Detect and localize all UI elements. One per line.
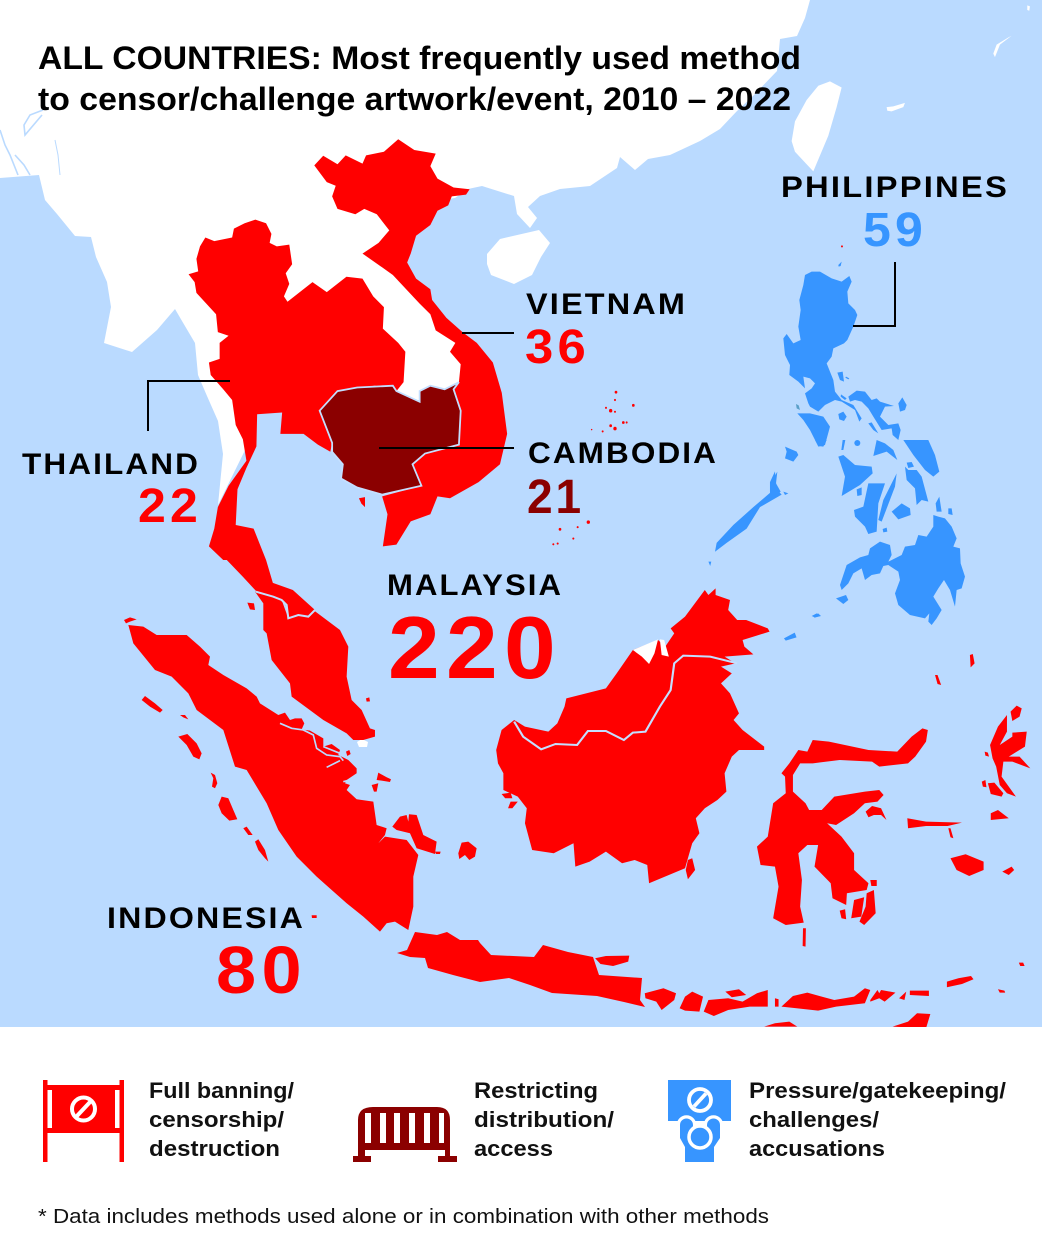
text: full banning — [149, 1078, 294, 1161]
map: neighbouring land — [0, 0, 1030, 747]
text: full banning: censorship/ — [149, 1107, 284, 1132]
title: ALL COUNTRIES: Most frequently used method — [38, 40, 801, 76]
label: Thailand 22: THAILAND — [22, 448, 200, 481]
label: Malaysia 220: MALAYSIA — [387, 569, 563, 602]
footnote: * Data includes methods used alone or in combination with other methods — [38, 1205, 769, 1228]
icon: banning barrier — [43, 1080, 124, 1162]
label: Malaysia 220: 220 — [388, 598, 562, 697]
label: Indonesia 80: INDONESIA — [107, 902, 305, 935]
label: Philippines 59: PHILIPPINES — [781, 171, 1009, 204]
leader lines — [148, 262, 895, 448]
label: Vietnam 36: VIETNAM — [526, 288, 687, 321]
title — [38, 40, 801, 117]
label: Vietnam 36 — [525, 288, 687, 374]
map: Borneo — [496, 588, 770, 883]
icon: restricting barricade — [353, 1107, 457, 1162]
text: pressure — [749, 1078, 1006, 1161]
map: Sumatra and nearby islands — [124, 617, 477, 932]
label: Indonesia 80: 80 — [216, 933, 307, 1008]
text: pressure: Pressure/gatekeeping/ — [749, 1078, 1006, 1103]
map: Paracel and Spratly islets — [552, 245, 843, 545]
text: full banning: Full banning/ — [149, 1078, 294, 1103]
text: restricting: distribution/ — [474, 1107, 614, 1132]
text: pressure: accusations — [749, 1136, 885, 1161]
label: Cambodia 21: 21 — [527, 471, 584, 524]
label: Vietnam 36: 36 — [525, 321, 590, 374]
map: Java and Lesser Sunda — [397, 932, 1025, 1028]
text: restricting: Restricting — [474, 1078, 598, 1103]
map: Cambodia — [320, 382, 461, 495]
text: pressure: challenges/ — [749, 1107, 879, 1132]
text: restricting: access — [474, 1136, 553, 1161]
label: Thailand 22: 22 — [138, 480, 202, 533]
map: Malaysia peninsula — [247, 592, 375, 740]
map: Philippines — [708, 262, 965, 641]
icon: pressure hand — [668, 1080, 731, 1162]
legend panel — [0, 1027, 1042, 1252]
label: Indonesia 80 — [107, 902, 307, 1008]
label: Thailand 22 — [22, 448, 202, 533]
text: restricting — [474, 1078, 614, 1161]
label: Cambodia 21: CAMBODIA — [528, 437, 718, 470]
map: Sulawesi and Maluku — [757, 654, 1030, 947]
label: Cambodia 21 — [527, 437, 718, 524]
text: full banning: destruction — [149, 1136, 280, 1161]
map: rivers on land — [0, 110, 60, 175]
label: Philippines 59: 59 — [863, 204, 927, 257]
title: to censor/challenge artwork/event, 2010 – 2022 — [38, 81, 791, 117]
label: Philippines 59 — [781, 171, 1009, 257]
map: Thailand — [189, 220, 405, 620]
map: Vietnam — [314, 139, 507, 546]
